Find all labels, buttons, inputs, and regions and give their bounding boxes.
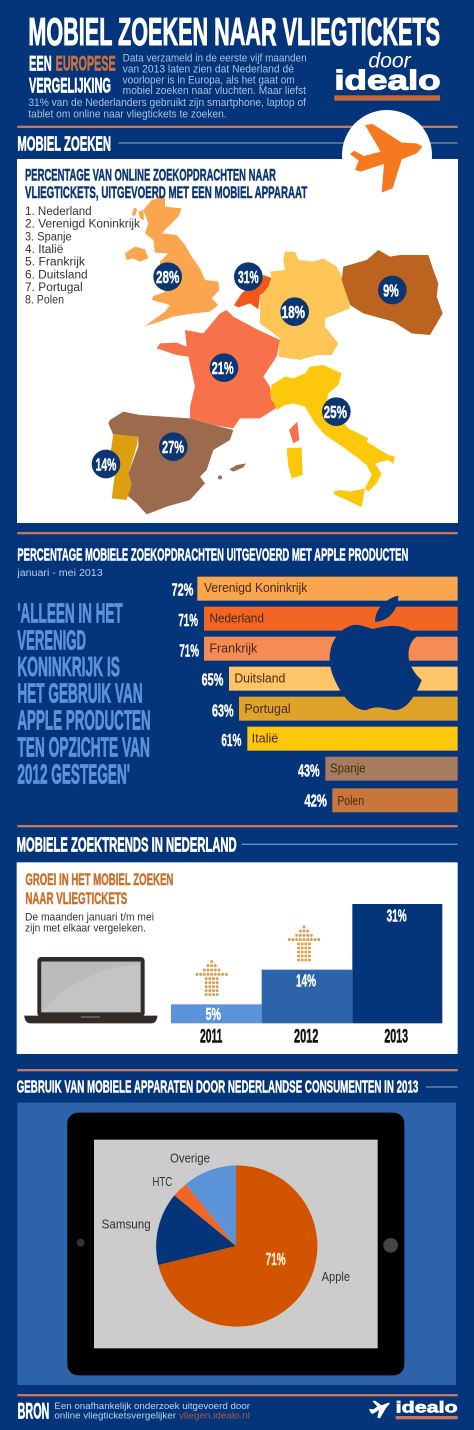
bar chart: apple share by country: 42% xyxy=(304,791,327,811)
subtitle xyxy=(29,52,116,98)
icon: airplane badge xyxy=(342,110,432,200)
bar chart: apple share by country: 61% xyxy=(221,730,241,750)
chart note xyxy=(25,912,154,935)
section: apple products: APPLE PRODUCTEN xyxy=(17,704,151,735)
map: united kingdom and ireland xyxy=(125,197,219,326)
intro text xyxy=(28,53,307,120)
logo: door idealo: idealo xyxy=(334,64,441,95)
source text: vliegen.idealo.nl xyxy=(179,1410,250,1420)
map: poland xyxy=(342,250,443,335)
map percentage badges: 21% xyxy=(212,358,234,378)
bar chart: apple share by country: Verenigd Koninkrijk xyxy=(204,581,308,595)
bar chart: apple share by country: Nederland xyxy=(209,612,264,626)
list: country ranking: 1. Nederland xyxy=(25,204,92,218)
source text: Een onafhankelijk onderzoek uitgevoerd door xyxy=(54,1401,250,1411)
pie chart: device share xyxy=(102,1152,350,1327)
quote: 'ALLEEN IN HET xyxy=(17,598,123,629)
panel: tablet pie chart xyxy=(17,1103,456,1385)
bar chart: apple share by country: Duitsland xyxy=(234,672,285,686)
icon: tablet xyxy=(67,1113,404,1375)
pie chart: device share: HTC xyxy=(152,1175,172,1189)
bar chart: apple share by country: 71% xyxy=(178,610,198,630)
section heading: mobiel zoeken: MOBIEL ZOEKEN xyxy=(17,133,111,156)
list: country ranking: 6. Duitsland xyxy=(25,267,88,281)
quote: VERENIGD xyxy=(17,624,86,655)
logo: idealo footer: idealo xyxy=(396,1400,458,1417)
list: country ranking: 4. Italië xyxy=(25,242,63,256)
map: portugal xyxy=(110,434,138,500)
subtitle: EEN xyxy=(29,52,52,76)
map: germany xyxy=(260,252,350,360)
bar chart: yearly growth: 2013 xyxy=(384,1026,408,1047)
intro text: 31% van de Nederlanders gebruikt zijn smartphone, laptop of xyxy=(28,97,306,109)
list: country ranking: 3. Spanje xyxy=(25,229,72,243)
intro text: Data verzameld in de eerste vijf maanden xyxy=(123,53,307,65)
bar chart: apple share by country: Italië xyxy=(252,732,278,746)
pie chart: device share: Overige xyxy=(170,1152,210,1166)
section: devices xyxy=(17,1069,458,1385)
map: netherlands xyxy=(234,275,272,309)
bar chart: yearly growth: 5% xyxy=(206,1004,221,1024)
section: apple products: TEN OPZICHTE VAN xyxy=(17,732,150,763)
chart note: zijn met elkaar vergeleken. xyxy=(25,923,146,935)
map: italy xyxy=(270,365,395,507)
map: france xyxy=(157,310,280,428)
map percentage badges: 9% xyxy=(383,280,399,300)
intro text: van 2013 laten zien dat Nederland dé xyxy=(123,64,294,76)
pie chart: device share: Apple xyxy=(322,1270,350,1284)
footer: BRON xyxy=(18,1398,49,1423)
bar chart: apple share by country: 71% xyxy=(179,641,199,661)
bar chart: yearly growth: 31% xyxy=(387,906,407,926)
quote xyxy=(17,598,151,789)
panel: europe map xyxy=(17,159,458,523)
logo: door idealo xyxy=(334,49,441,101)
bar chart: apple share by country: 63% xyxy=(212,701,234,721)
map percentage badges: 18% xyxy=(282,302,305,322)
map percentage badges: 31% xyxy=(238,267,259,287)
bar chart: apple share by country: 43% xyxy=(298,761,320,781)
bar chart: yearly growth: 2011 xyxy=(200,1026,222,1047)
period label: januari - mei 2013 xyxy=(16,568,103,579)
list: country ranking: 5. Frankrijk xyxy=(25,255,86,269)
map percentage badges: 14% xyxy=(96,454,116,474)
bar chart: apple share by country: Portugal xyxy=(244,702,291,716)
map: corsica xyxy=(289,422,299,443)
bar chart: yearly growth: 14% xyxy=(296,971,316,991)
header xyxy=(28,10,441,120)
logo: idealo footer xyxy=(396,1400,458,1419)
map percentage badges: 28% xyxy=(156,267,179,287)
list: country ranking: 7. Portugal xyxy=(25,280,83,294)
section: apple products xyxy=(16,532,458,812)
bar chart: apple share by country: Polen xyxy=(337,794,364,808)
icon: laptop xyxy=(24,957,157,1023)
bar chart: yearly growth: 2012 xyxy=(294,1026,318,1047)
bar chart: apple share by country: 65% xyxy=(202,670,223,690)
map percentage badges: 27% xyxy=(162,437,184,457)
list: country ranking: 2. Verenigd Koninkrijk xyxy=(25,217,141,231)
source text xyxy=(54,1401,250,1420)
subtitle: VERGELIJKING xyxy=(29,74,111,98)
quote: KONINKRIJK IS xyxy=(17,651,120,682)
chart heading: NAAR VLIEGTICKETS xyxy=(25,889,127,908)
icon: small airplane xyxy=(369,1401,390,1418)
icon: apple logo xyxy=(330,596,422,710)
list: country ranking: 8. Polen xyxy=(25,293,64,307)
intro text: tablet om online naar vliegtickets te zoeken. xyxy=(28,108,227,120)
section: trends in the netherlands xyxy=(17,825,458,1054)
source text: online vliegticketsvergelijker xyxy=(54,1410,176,1420)
map: spain xyxy=(108,412,246,514)
pie chart: device share: 71% xyxy=(266,1249,286,1269)
arrow: growth 2011 xyxy=(197,962,226,995)
section heading: trends: MOBIELE ZOEKTRENDS IN NEDERLAND xyxy=(17,834,237,857)
chart note: De maanden januari t/m mei xyxy=(25,912,154,924)
bar chart: apple share by country: Spanje xyxy=(330,762,366,776)
map heading: PERCENTAGE VAN ONLINE ZOEKOPDRACHTEN NAAR xyxy=(25,166,276,185)
footer xyxy=(17,1394,458,1423)
subtitle: EUROPESE xyxy=(56,52,116,76)
intro text: voorloper is in Europa, als het gaat om xyxy=(123,74,295,86)
intro text: mobiel zoeken naar vluchten. Maar liefst xyxy=(123,85,306,97)
logo: door idealo: door xyxy=(368,49,412,73)
chart heading: GROEI IN HET MOBIEL ZOEKEN xyxy=(25,870,173,889)
bar chart: apple share by country: 72% xyxy=(172,580,193,600)
arrow: growth 2012 xyxy=(289,927,319,960)
pie chart: device share: Samsung xyxy=(102,1217,151,1231)
bar chart: apple share by country: Frankrijk xyxy=(209,642,258,656)
map heading xyxy=(25,166,307,202)
chart heading xyxy=(25,870,173,908)
panel: growth chart xyxy=(17,862,458,1054)
bar chart: yearly growth xyxy=(171,904,442,1047)
map percentage badges xyxy=(92,262,407,478)
list: country ranking xyxy=(25,204,141,307)
bar chart: apple share by country xyxy=(172,577,458,812)
map percentage badges: 25% xyxy=(324,402,347,422)
quote: 2012 GESTEGEN' xyxy=(17,758,130,789)
quote: HET GEBRUIK VAN xyxy=(17,678,143,709)
